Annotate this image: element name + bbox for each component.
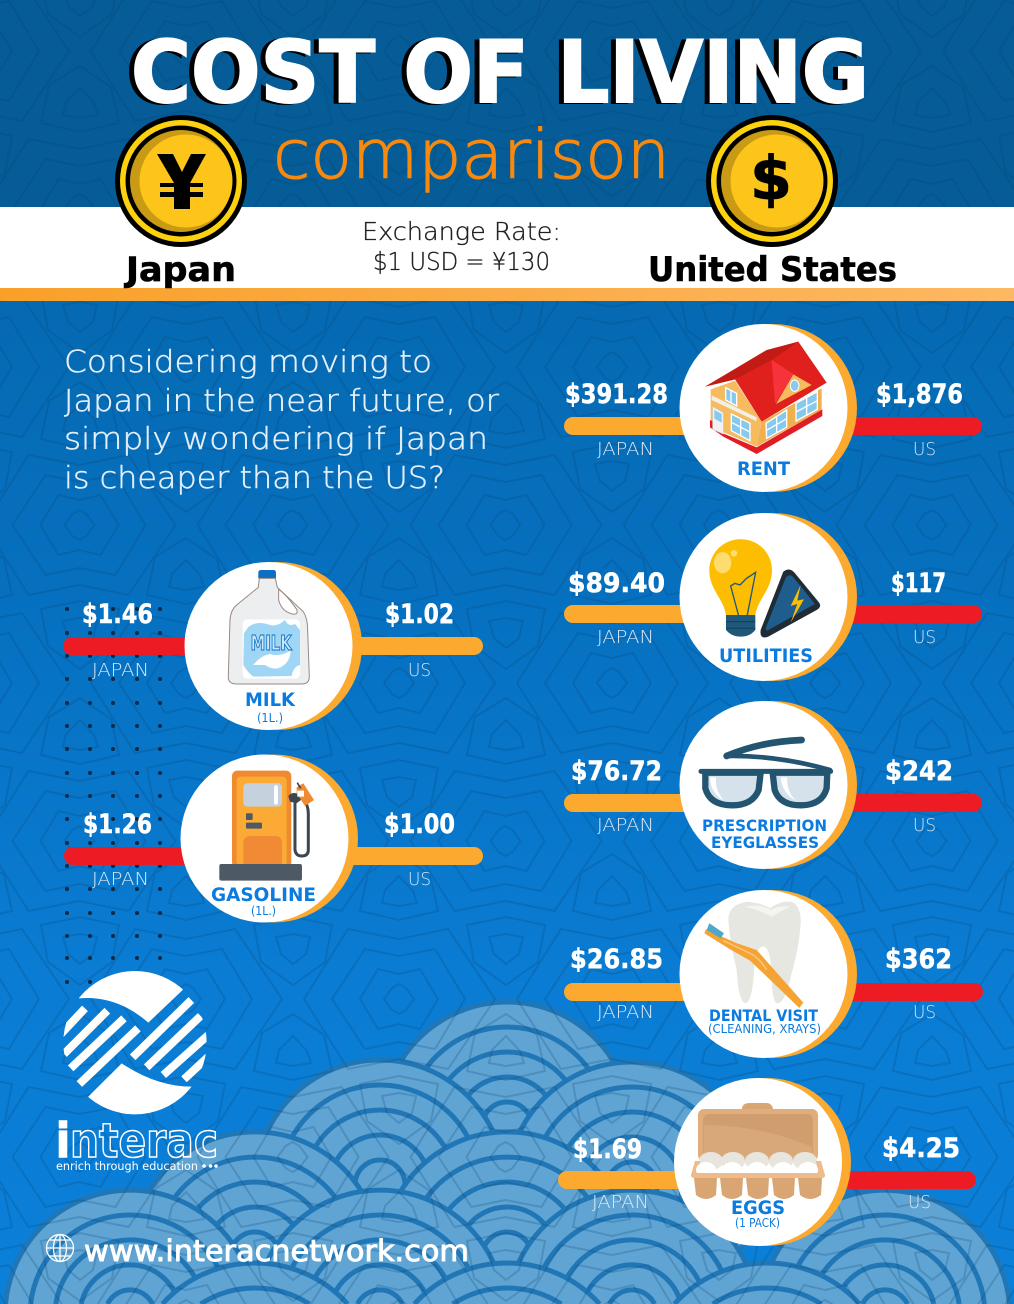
values: gasoline: $1.00	[384, 809, 455, 840]
values: milk: $1.02	[385, 599, 454, 630]
values: eggs: $1.69	[573, 1134, 642, 1165]
values: eggs: $4.25	[882, 1133, 960, 1164]
website url: www.interacnetwork.com	[84, 1234, 469, 1268]
label: gasoline: GASOLINE	[211, 884, 316, 906]
exchange rate: $1 USD = ¥130	[373, 247, 550, 276]
values: gasoline: $1.26	[83, 809, 152, 840]
values: eggs: US	[908, 1192, 931, 1213]
label: United States: United States	[648, 250, 897, 290]
label: dental visit: (CLEANING, XRAYS)	[708, 1022, 821, 1036]
label: milk: (1L.)	[257, 711, 283, 725]
label: eggs	[731, 1197, 785, 1230]
icon: egg carton	[691, 1103, 825, 1199]
values: dental	[570, 944, 952, 1023]
label: prescription eyeglasses: PRESCRIPTION	[702, 816, 827, 835]
values: rent: JAPAN	[597, 439, 654, 460]
icon: globe	[46, 1234, 74, 1262]
white band	[0, 207, 1014, 288]
values: eyeglasses: $76.72	[571, 756, 662, 787]
values: dental: JAPAN	[597, 1002, 654, 1023]
comparison: utilities	[564, 513, 982, 681]
label: prescription eyeglasses	[702, 816, 827, 852]
label: eggs: EGGS	[731, 1197, 785, 1219]
values: milk: $1.46	[82, 599, 153, 630]
comparison: gasoline	[64, 754, 483, 922]
intro text: Considering moving to	[64, 345, 432, 380]
intro text: Japan in the near future, or	[64, 384, 500, 419]
label: milk: MILK	[245, 689, 296, 711]
logo: interac wordmark: enrich through education	[56, 1159, 198, 1173]
dot grid	[65, 607, 162, 984]
values: gasoline	[83, 809, 455, 890]
values: utilities: $89.40	[568, 568, 665, 599]
icon: light bulb and energy bolt	[709, 539, 820, 637]
values: utilities: US	[913, 627, 936, 648]
values: eyeglasses	[571, 756, 953, 836]
values: dental: $362	[885, 944, 952, 975]
logo: interac mark	[59, 970, 208, 1115]
comparison: eyeglasses	[564, 701, 982, 869]
values: eyeglasses: US	[913, 815, 936, 836]
intro text	[64, 345, 500, 496]
label: milk	[245, 689, 296, 725]
icon: glasses	[701, 740, 831, 805]
label: prescription eyeglasses: EYEGLASSES	[711, 833, 819, 852]
values: utilities: $117	[891, 568, 946, 599]
values: utilities	[568, 568, 946, 648]
icon: house	[705, 342, 827, 454]
values: gasoline: JAPAN	[92, 869, 149, 890]
comparison: eggs	[558, 1078, 976, 1246]
intro text: is cheaper than the US?	[64, 461, 445, 496]
comparison: dental visit	[564, 890, 983, 1058]
label: gasoline	[211, 884, 316, 918]
values: rent: US	[913, 439, 936, 460]
comparison: milk	[63, 562, 483, 730]
logo: interac wordmark: interac	[56, 1114, 218, 1169]
values: dental: US	[913, 1002, 936, 1023]
label: Japan: Japan	[124, 250, 236, 290]
title: COST OF LIVING	[126, 24, 864, 124]
values: eggs: JAPAN	[592, 1192, 649, 1213]
icon: dollar coin	[706, 115, 838, 247]
values: eyeglasses: $242	[885, 756, 953, 787]
values: dental: $26.85	[570, 944, 663, 975]
icon: gas pump	[219, 771, 314, 881]
label: dental visit: DENTAL VISIT	[709, 1006, 818, 1025]
values: rent: $1,876	[876, 379, 963, 410]
exchange rate	[362, 217, 561, 276]
icon: dollar coin: $	[750, 144, 792, 214]
values: eggs	[573, 1133, 960, 1213]
label: eggs: (1 PACK)	[735, 1216, 780, 1230]
intro text: simply wondering if Japan	[64, 422, 488, 457]
icon: milk jug: MILK	[251, 631, 293, 655]
values: milk: JAPAN	[92, 660, 149, 681]
label: gasoline: (1L.)	[251, 904, 276, 918]
icon: tooth and toothbrush	[704, 902, 803, 1008]
header background	[0, 0, 1014, 208]
exchange rate: Exchange Rate:	[362, 217, 561, 246]
icon: yen coin	[115, 115, 247, 247]
icon: milk jug	[228, 570, 309, 684]
seigaiha wave pattern	[6, 1002, 1010, 1304]
label: utilities: UTILITIES	[719, 645, 813, 667]
values: gasoline: US	[408, 869, 431, 890]
values: rent	[565, 379, 963, 460]
comparison: rent	[564, 324, 982, 492]
values: eyeglasses: JAPAN	[597, 815, 654, 836]
orange divider	[0, 288, 1014, 301]
values: utilities: JAPAN	[597, 627, 654, 648]
subtitle: comparison	[273, 116, 670, 195]
values: milk: US	[408, 660, 431, 681]
title: COST OF LIVING	[131, 23, 869, 123]
label: dental visit	[708, 1006, 821, 1036]
label: rent: RENT	[737, 458, 790, 480]
values: milk	[82, 599, 454, 681]
values: rent: $391.28	[565, 379, 668, 410]
